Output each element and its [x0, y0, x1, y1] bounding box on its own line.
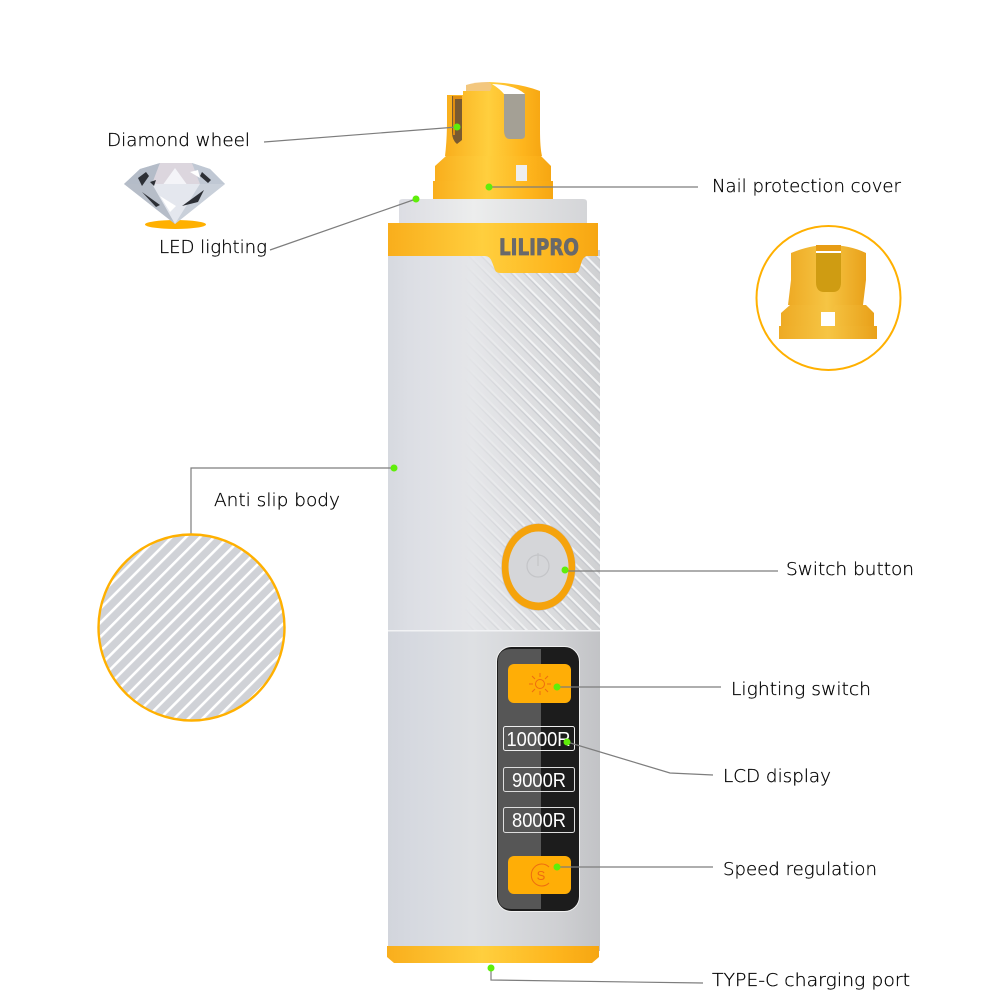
inset rim — [816, 245, 841, 251]
inset shoulder — [781, 305, 874, 326]
callout: switch button — [562, 559, 914, 580]
cover dome — [466, 82, 500, 91]
callout: LCD display: LCD display — [723, 766, 831, 787]
callout: LED lighting: LED lighting — [159, 237, 267, 258]
callout: LED lighting — [159, 196, 420, 258]
callout: diamond wheel — [107, 124, 460, 151]
icon: speed S: S — [537, 868, 546, 883]
right window — [504, 94, 525, 139]
LCD speed 10000R: 10000R — [506, 729, 570, 751]
brand logo: LILIPRO — [499, 236, 579, 261]
control panel — [496, 646, 580, 912]
callout: speed regulation: Speed regulation — [723, 859, 877, 880]
panel lighter half — [498, 649, 541, 909]
callout: LCD display — [564, 738, 831, 787]
callout: TYPE-C charging port — [488, 964, 910, 991]
cover shoulder — [435, 156, 551, 181]
callout: anti slip body: Anti slip body — [214, 490, 340, 511]
inset notch — [821, 312, 835, 326]
left window — [452, 96, 462, 144]
device: nail grinder — [387, 82, 600, 963]
LCD speed 8000R: 8000R — [512, 810, 566, 832]
lighting button — [508, 664, 571, 703]
cover notch — [516, 165, 527, 181]
callout: switch button: Switch button — [786, 559, 914, 580]
bottom yellow base — [387, 946, 599, 963]
callout: nail protection cover: Nail protection cover — [712, 176, 902, 197]
callout: lighting switch: Lighting switch — [731, 679, 871, 700]
callout: anti slip body — [191, 464, 398, 535]
icon: sun — [529, 673, 551, 695]
lower body — [388, 631, 600, 951]
callout: TYPE-C charging port: TYPE-C charging port — [712, 970, 910, 991]
body seam — [388, 630, 600, 632]
LCD speed 9000R: 9000R — [512, 770, 566, 792]
nail protection cover — [433, 82, 553, 199]
icon: power — [527, 553, 549, 577]
inset sliver — [816, 251, 841, 253]
yellow collar with logo tab — [388, 223, 598, 273]
white LED ring — [399, 199, 587, 224]
grip body upper — [388, 250, 600, 630]
callout: diamond wheel: Diamond wheel — [107, 130, 250, 151]
inset: anti slip texture — [98, 534, 284, 720]
sliver above window — [492, 84, 525, 94]
callout: speed regulation — [554, 859, 877, 880]
inset: cover detail — [756, 226, 900, 370]
inset flange — [779, 326, 877, 339]
inset upper cap — [788, 245, 866, 310]
cover cup — [445, 82, 542, 156]
inset window — [816, 253, 841, 292]
cover flange — [433, 181, 553, 199]
icon: diamond — [124, 163, 225, 229]
power switch button — [502, 524, 576, 610]
speed button — [508, 856, 571, 894]
left window rim — [453, 96, 462, 135]
callout: nail protection cover — [486, 176, 902, 197]
panel frame — [496, 646, 580, 912]
callout: lighting switch — [554, 679, 871, 700]
infographic canvas — [97, 82, 912, 990]
